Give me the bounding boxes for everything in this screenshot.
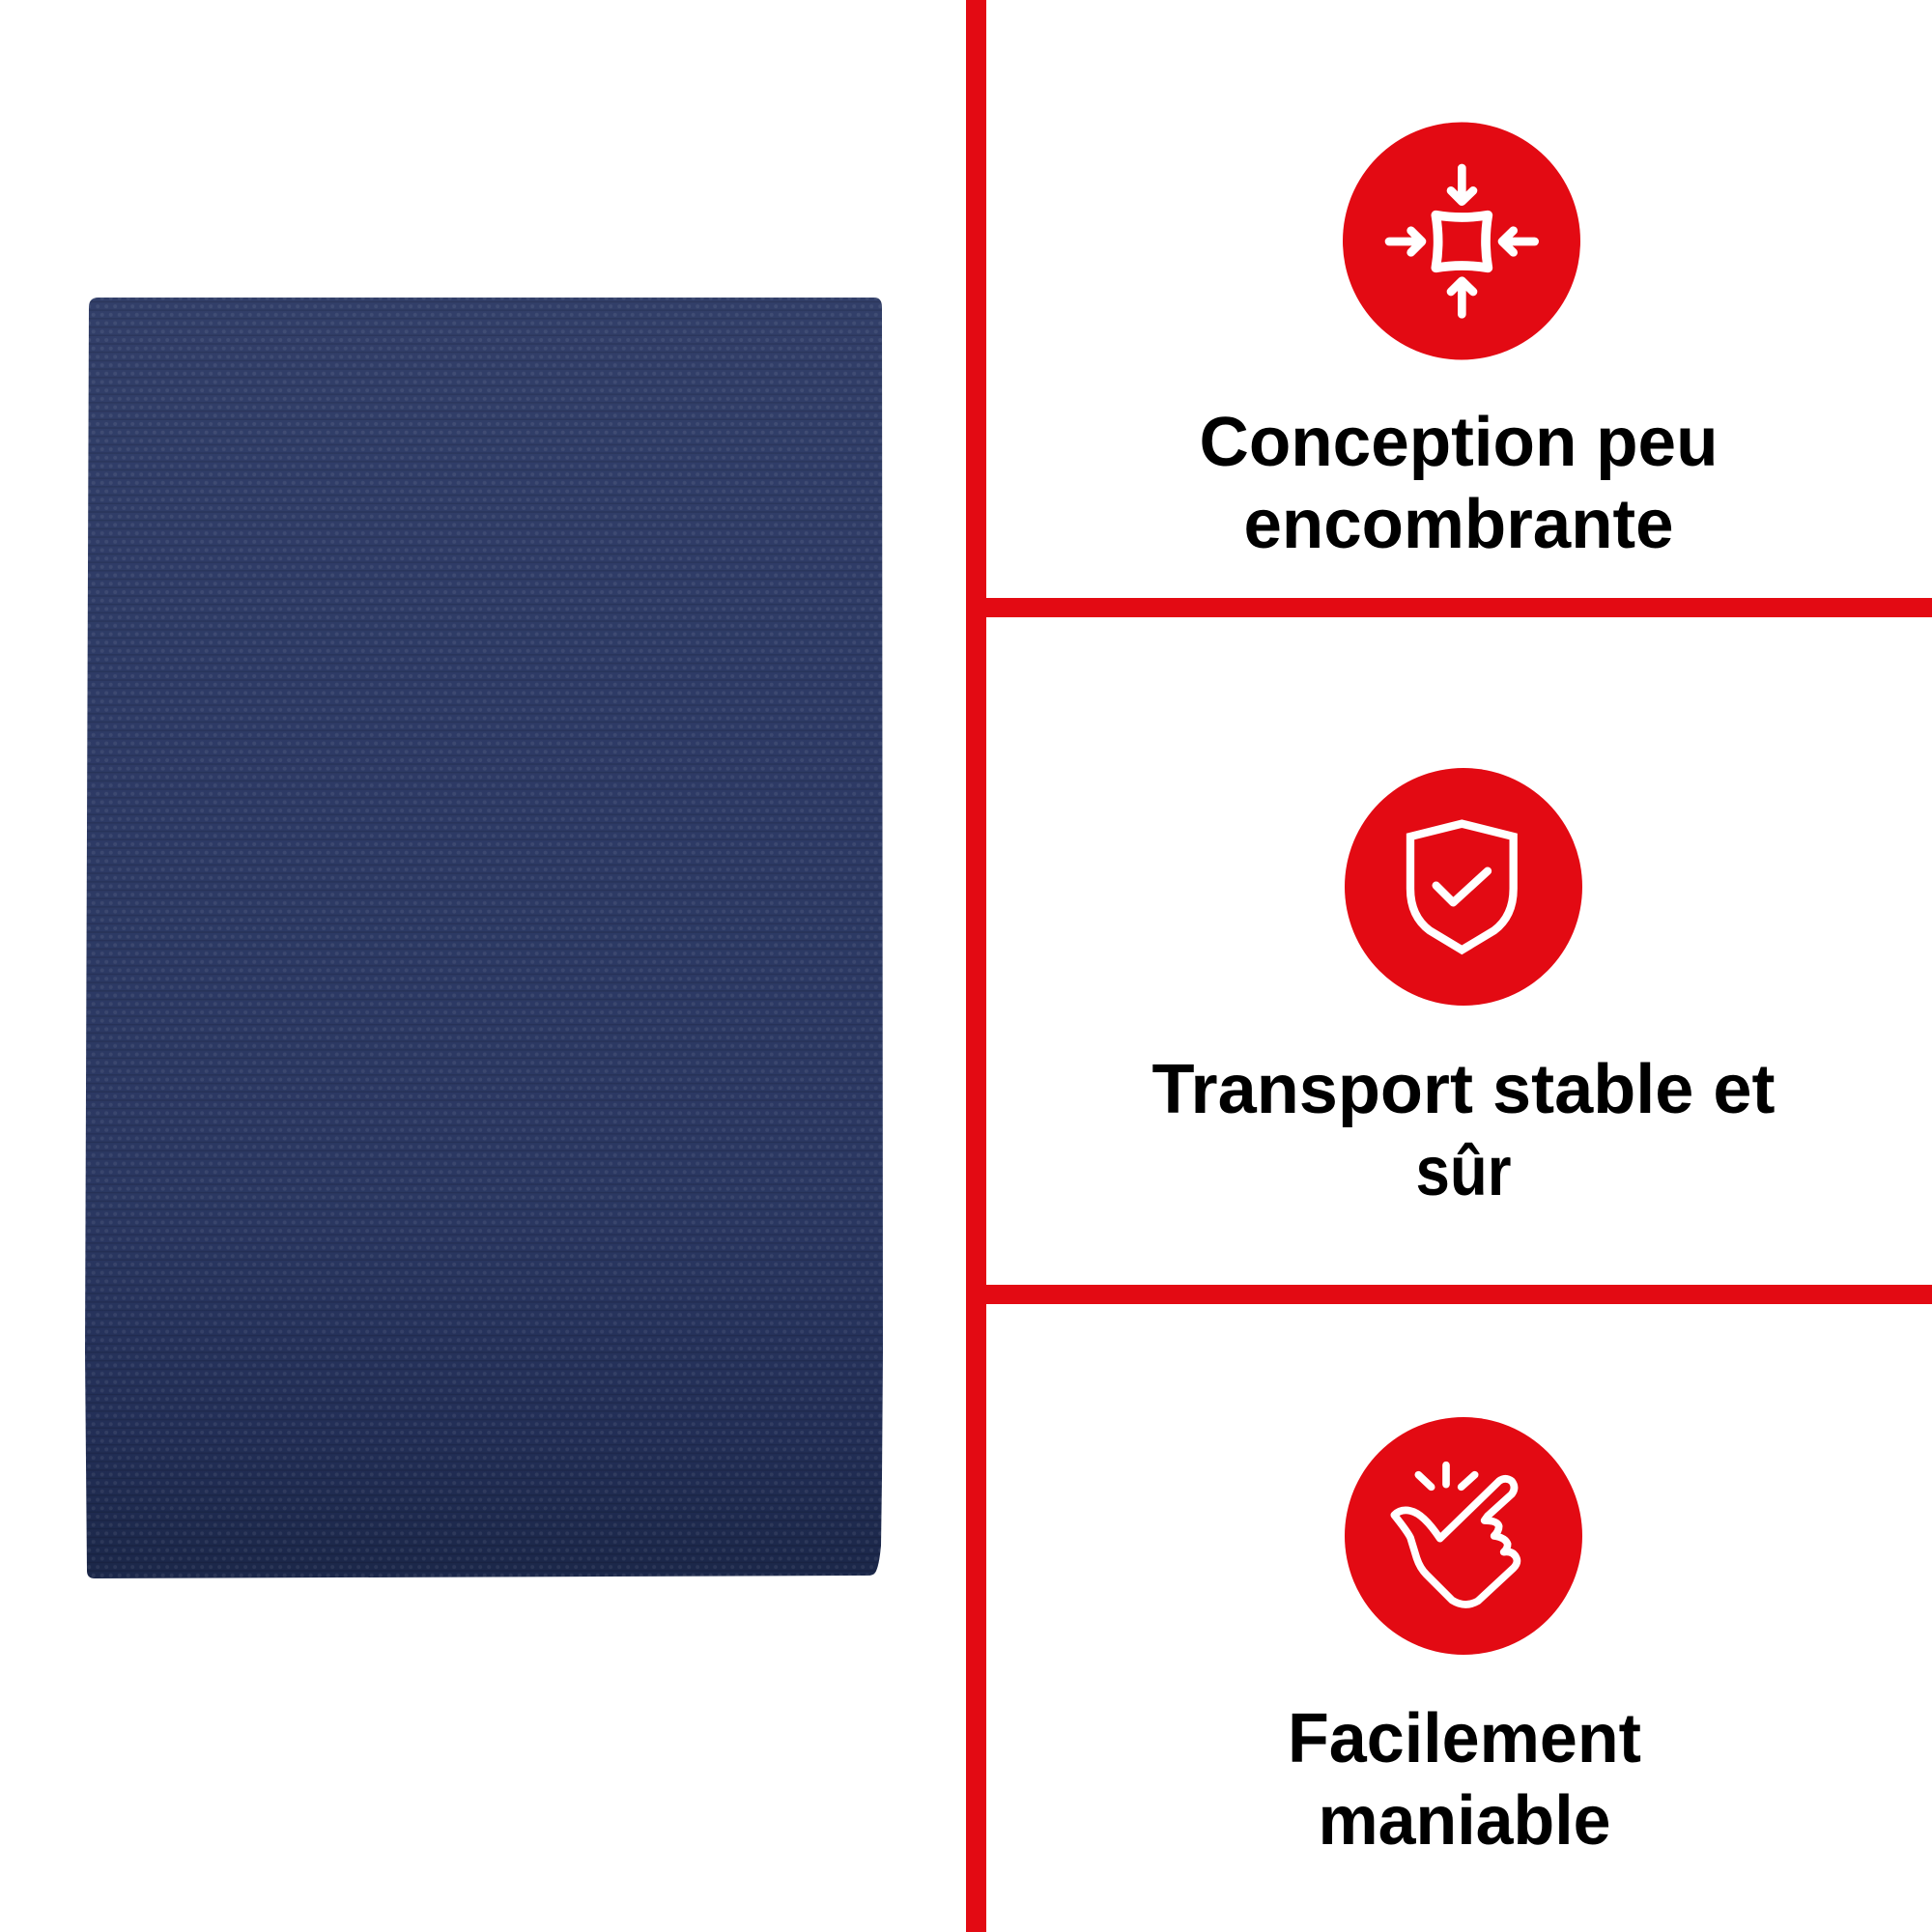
product: navy textured mat — [85, 298, 883, 1578]
icon: shield with check — [1345, 768, 1582, 1006]
icon: compress arrows — [1343, 122, 1580, 359]
panel: compact design — [1200, 122, 1718, 563]
heading: stable transport — [1151, 1051, 1776, 1210]
heading: stable transport: Transport stable et — [1151, 1051, 1776, 1128]
heading: stable transport: sûr — [1416, 1133, 1511, 1210]
panel: stable transport — [1151, 768, 1776, 1210]
heading: compact design: Conception peu — [1200, 404, 1718, 481]
panel: easy handling — [1288, 1417, 1641, 1860]
heading: easy handling: Facilement — [1288, 1700, 1641, 1777]
horizontal red divider top — [966, 598, 1932, 617]
heading: compact design — [1200, 404, 1718, 563]
icon: snapping fingers — [1345, 1417, 1582, 1655]
heading: easy handling — [1288, 1700, 1641, 1860]
horizontal red divider bottom — [966, 1285, 1932, 1304]
heading: easy handling: maniable — [1318, 1782, 1611, 1860]
heading: compact design: encombrante — [1244, 486, 1673, 563]
vertical red divider — [966, 0, 986, 1932]
